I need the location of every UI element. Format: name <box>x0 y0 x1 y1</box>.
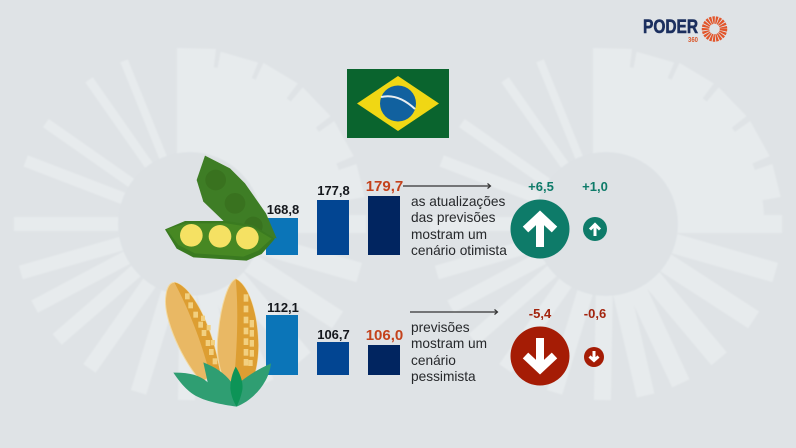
text: pessimistic scenario: pessimista <box>411 369 476 384</box>
icon: small down arrow <box>584 347 604 367</box>
change labels: corn <box>529 306 606 321</box>
background sunburst left <box>14 48 366 400</box>
logo: Poder360: PODER <box>643 16 698 38</box>
icon: soybean pods <box>165 156 277 261</box>
change labels: soybean: +1,0 <box>582 179 608 194</box>
text: optimistic scenario: mostram um <box>411 227 487 242</box>
change labels: soybean: +6,5 <box>528 179 554 194</box>
bar chart: soybean: 168,8 <box>267 202 299 217</box>
icon: big down arrow <box>510 326 570 386</box>
text: pessimistic scenario: cenário <box>411 353 456 368</box>
background sunburst right <box>430 48 782 400</box>
text: pessimistic scenario: mostram um <box>411 336 487 351</box>
icon: corn cobs <box>165 279 271 407</box>
text: optimistic scenario: das previsões <box>411 210 496 225</box>
change labels: soybean <box>528 179 608 194</box>
text: optimistic scenario: as atualizações <box>411 194 506 209</box>
icon: small up arrow <box>583 217 607 241</box>
text: pessimistic scenario <box>411 320 487 384</box>
text: optimistic scenario: cenário otimista <box>411 243 507 258</box>
arrow: soybean <box>403 184 490 188</box>
change labels: corn: -5,4 <box>529 306 552 321</box>
bar chart: soybean: 177,8 <box>317 183 350 198</box>
flag of Brazil <box>347 69 449 138</box>
bar chart: corn: 112,1 <box>267 300 299 315</box>
bar chart: corn: 106,0 <box>366 327 403 344</box>
change labels: corn: -0,6 <box>584 306 606 321</box>
logo: Poder360: 360 <box>688 37 698 44</box>
icon: big up arrow <box>510 200 570 258</box>
bar chart: soybean: 179,7 <box>366 178 403 195</box>
bar chart: corn <box>266 300 403 375</box>
bar chart: corn: 106,7 <box>317 327 350 342</box>
logo: Poder360 <box>643 16 724 44</box>
arrow: corn <box>410 310 498 314</box>
bar chart: soybean <box>266 178 403 255</box>
text: pessimistic scenario: previsões <box>411 320 470 335</box>
text: optimistic scenario <box>411 194 507 258</box>
